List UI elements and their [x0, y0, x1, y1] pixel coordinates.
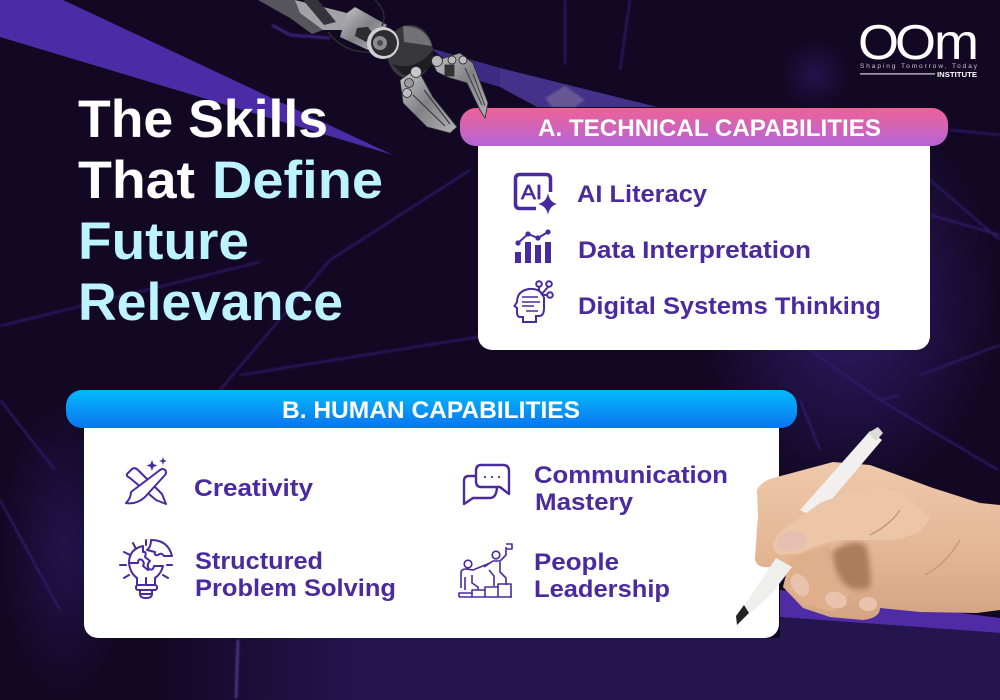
text: People Leadership — [534, 549, 670, 603]
icon: AI sparkle: AI — [521, 182, 542, 204]
text: Structured Problem Solving: Problem Solving — [195, 575, 396, 602]
title: Relevance — [78, 273, 343, 332]
panel: human capabilities — [66, 390, 797, 638]
logo: m — [934, 14, 979, 70]
text: Digital Systems Thinking: Digital Systems Thinking — [578, 293, 881, 320]
text: Communication Mastery: Communication — [534, 462, 728, 489]
text: Data Interpretation: Data Interpretation — [578, 237, 811, 264]
header: technical capabilities: A. TECHNICAL CAPABILITIES — [538, 115, 881, 142]
text: AI Literacy: AI Literacy — [577, 181, 708, 208]
text: Structured Problem Solving: Structured — [195, 548, 323, 575]
panel: technical capabilities — [460, 108, 948, 350]
text: Structured Problem Solving — [195, 548, 396, 602]
robot arm — [258, 0, 488, 133]
hand silhouette — [755, 462, 1000, 620]
title — [78, 90, 383, 332]
icon: puzzle lightbulb — [120, 540, 172, 598]
text: Communication Mastery — [534, 462, 728, 516]
thumb — [773, 488, 930, 555]
icon: bar chart — [515, 229, 551, 263]
header: technical capabilities — [460, 108, 948, 146]
header: human capabilities — [66, 390, 797, 428]
logo: O — [858, 16, 899, 70]
title: The Skills — [78, 90, 328, 149]
icon: people climbing steps — [459, 544, 512, 597]
icon: pencil and brush — [126, 457, 167, 504]
pen upper — [800, 431, 882, 518]
text: Communication Mastery: Mastery — [535, 489, 634, 516]
title: Future — [78, 212, 249, 271]
header: human capabilities: B. HUMAN CAPABILITIES — [282, 397, 580, 424]
hand holding pen — [736, 427, 1000, 625]
icon: AI sparkle — [516, 174, 557, 215]
icon: speech bubbles — [464, 465, 509, 504]
logo — [858, 14, 979, 79]
text: People Leadership: Leadership — [534, 576, 670, 603]
text: People Leadership: People — [534, 549, 619, 576]
logo: Shaping Tomorrow, Today — [860, 63, 978, 70]
logo: O — [895, 16, 936, 70]
claw — [400, 53, 488, 133]
icon: head with circuits — [514, 281, 553, 322]
title: Define — [212, 151, 383, 210]
text: Creativity: Creativity — [194, 475, 314, 502]
logo: INSTITUTE — [937, 70, 977, 79]
title: That — [78, 151, 195, 210]
pen tip — [736, 558, 792, 625]
